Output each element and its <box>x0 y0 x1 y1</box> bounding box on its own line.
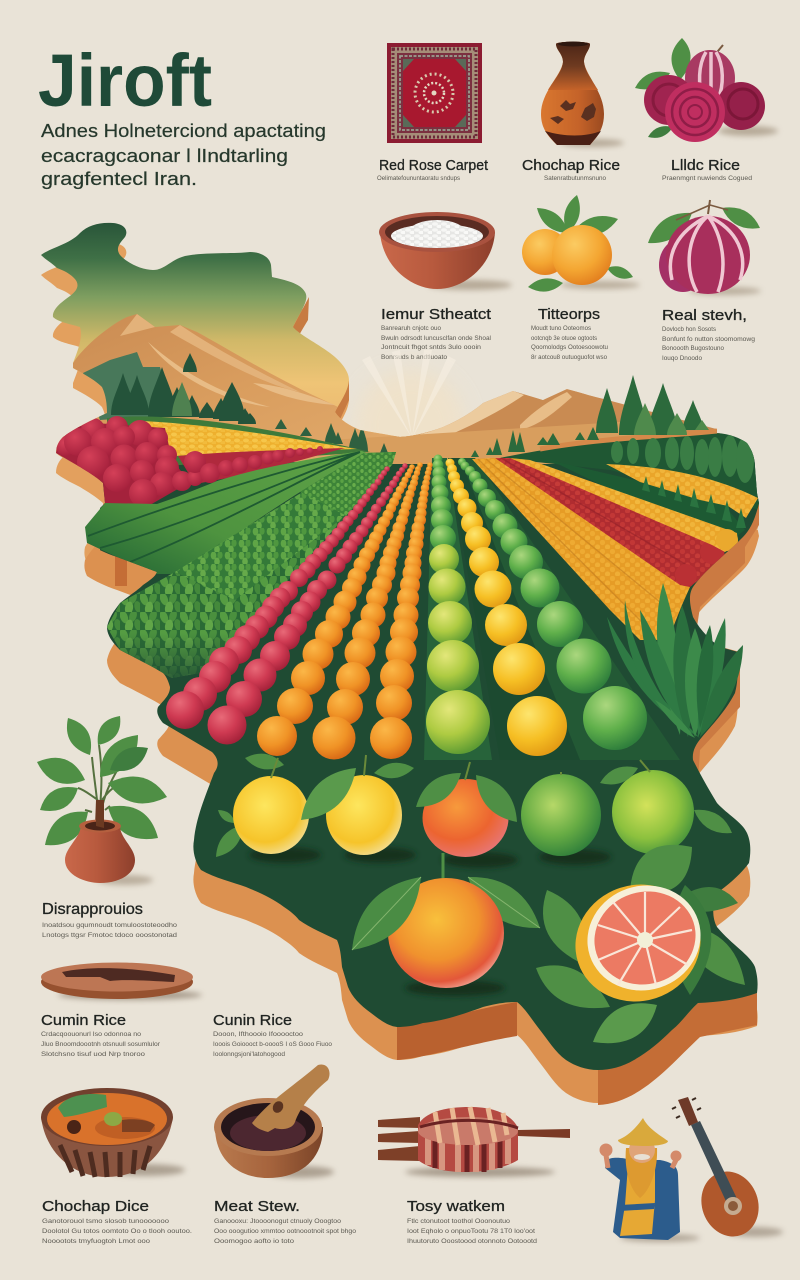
grapefruit with leaves <box>352 853 540 996</box>
item: wooden plate <box>41 962 202 1000</box>
right mountains <box>330 389 720 464</box>
item: red rose carpet: Oelimatefoununtaoratu sndups <box>377 175 461 182</box>
fruit row: large citrus <box>216 754 732 868</box>
grass band <box>107 417 370 470</box>
item: striped drum: Ioot Eqholo o onpuoTootu 78 1T0 loo'oot <box>407 1228 535 1235</box>
item: striped fig: Iouqo Dnoodo <box>662 355 702 362</box>
fruit row: lime F <box>426 454 490 754</box>
item: clay vase: Satenratbutunmsnuno <box>544 175 606 182</box>
item: striped drum <box>378 1107 570 1245</box>
lute <box>672 1097 783 1245</box>
yellow field <box>143 421 357 456</box>
subtitle: Adnes Holneterciond apactating <box>41 121 326 141</box>
subtitle <box>41 121 326 189</box>
fruit row: orange E <box>370 462 433 759</box>
text block: Meat Stew: Ganoooxu: Jtoooonogut ctnuoly Ooogtoo <box>214 1218 341 1225</box>
halved grapefruit <box>536 845 745 1043</box>
item: rice bowl: Iemur Stheatct <box>381 306 492 323</box>
item: clay vase: Chochap Rice <box>522 157 620 174</box>
map surface <box>30 220 780 1088</box>
item: rice bowl: Banrearuh cnjotc ouo <box>381 325 441 332</box>
item: oranges: Titteorps <box>538 306 600 323</box>
text block: Cunin Rice: Ioolonngsjoni'latohogood <box>213 1051 285 1058</box>
text block: Cumin Rice: Cumin Rice <box>41 1012 126 1029</box>
item: potted plant <box>37 716 167 885</box>
text block: Cumin Rice: Jluo Bnoomdoootnh otsnuull sosumlulor <box>41 1041 161 1048</box>
text block: Disrapprouios <box>42 901 177 939</box>
item: roses <box>635 38 778 182</box>
text block: Cunin Rice <box>213 1012 332 1058</box>
fruit row: orange D <box>312 462 423 760</box>
text block: Cumin Rice: Slotchsno tisuf uod Nrp tnoroo <box>41 1051 145 1058</box>
yellow strip <box>510 458 738 552</box>
item: striped fig <box>648 200 761 362</box>
text block: Cumin Rice <box>41 1012 161 1058</box>
item: roses: Llldc Rice <box>671 157 740 174</box>
title: Jiroft <box>38 39 212 122</box>
text block: Disrapprouios: Disrapprouios <box>42 901 143 918</box>
left hill and trees <box>83 352 388 453</box>
item: oranges: ootcnqb 3e otuoe ogtoots <box>531 335 598 342</box>
item: striped fig: Real stevh, <box>662 307 747 324</box>
item: oranges <box>522 195 640 361</box>
far right trees <box>471 375 709 457</box>
item: clay vase <box>522 42 624 182</box>
red strip <box>178 448 345 484</box>
text block: Chochap Dice: Ganotorouol tsmo slosob tunooooooo <box>42 1218 169 1225</box>
text block: Disrapprouios: Lnotogs ttgsr Fmotoc tdoco ooostonotad <box>42 932 177 939</box>
text block: Meat Stew: Ooomogoo aofto io toto <box>214 1238 294 1245</box>
text block: Chochap Dice <box>42 1198 192 1245</box>
item: rice bowl: Bwuln odrsodt luncusclfan onde Shoal <box>381 335 492 342</box>
fruit row: orange C <box>257 464 415 756</box>
green spikes below far strip <box>560 464 744 536</box>
item: striped drum: Tosy watkem <box>407 1198 505 1215</box>
item: oranges: Moudt tuno Ooteomos <box>531 325 592 332</box>
red strips <box>495 458 725 587</box>
text block: Meat Stew <box>214 1198 356 1245</box>
map: Jiroft landscape <box>30 220 780 1105</box>
item: oranges: Qoomolodgs Ootoesoowotu <box>531 344 608 351</box>
text block: Cumin Rice: Crdacqoouonurl Iso odonnoa no <box>41 1031 141 1038</box>
fruit row: green H <box>458 458 647 750</box>
fruit row: yellow G <box>446 458 567 756</box>
orange strips <box>472 458 690 640</box>
spiky plant <box>607 583 743 738</box>
sky <box>30 220 430 460</box>
right tree band <box>500 430 760 510</box>
item: striped fig: Bonoooth Bugostouno <box>662 345 724 352</box>
item: striped drum: Ftlc ctonutoot toothol Ooonoutuo <box>407 1218 510 1225</box>
text block: Chochap Dice: Chochap Dice <box>42 1198 149 1215</box>
item: rice stew bowl <box>41 1088 185 1177</box>
text block: Cunin Rice: Dooon, Ifthoooio Ifooooctoo <box>213 1031 303 1038</box>
text block: Disrapprouios: Inoatdsou gqumnoudt tomuloostoteoodho <box>42 922 177 929</box>
text block: Chochap Dice: Doolotol Gu totos oomtoto Oo o tlooh ooutoo. <box>42 1228 192 1235</box>
item: red rose carpet: Red Rose Carpet <box>379 157 489 174</box>
text block: Meat Stew: Ooo ooogutioo xmmtoo ootnoootnoit spot bhgo <box>214 1228 356 1235</box>
item: rice bowl: Jontncuit fhgot sntds 3ulo oooin <box>381 344 481 351</box>
text block: Chochap Dice: Nooootots tmyfuogtoh Lmot ooo <box>42 1238 150 1245</box>
item: striped drum: Ihuutoruto Ooostoood otonnoto Ootoootd <box>407 1238 537 1245</box>
far orange strip <box>606 464 758 518</box>
leafy bush field <box>107 452 396 678</box>
item: roses: Praenmgnt nuwiends Cogued <box>662 175 752 182</box>
left mountains <box>50 314 420 462</box>
character with hat <box>600 1118 700 1242</box>
green striped field <box>85 451 366 574</box>
text block: Meat Stew: Meat Stew. <box>214 1198 300 1215</box>
item: oranges: 8r aotcou8 outuoguofot wso <box>531 354 607 361</box>
spikes in front of far strip <box>642 476 746 528</box>
fruit row: red A <box>166 466 390 729</box>
item: rice bowl <box>379 212 512 361</box>
subtitle: gragfentecl Iran. <box>41 169 197 189</box>
lanes between rows <box>424 458 492 760</box>
item: mortar and pestle <box>214 1064 334 1178</box>
subtitle: ecacragcaonar l lIndtarling <box>41 146 288 166</box>
fruit row: red B <box>208 463 408 744</box>
raspberries <box>56 416 323 507</box>
sun rays <box>355 350 465 480</box>
item: rice bowl: Bonrsuds b andtluoato <box>381 354 447 361</box>
map terrace side <box>41 243 759 1105</box>
base dark green <box>100 448 780 1088</box>
item: striped fig: Bonfunt fo nutton stoomomowg <box>662 336 755 343</box>
text block: Cunin Rice: Iooois Goioooct b-ooooS I oS Gooo Fiuoo <box>213 1041 332 1048</box>
item: red rose carpet <box>377 43 489 182</box>
item: striped fig: Dovlocb hon Sosots <box>662 326 717 333</box>
text block: Cunin Rice: Cunin Rice <box>213 1012 292 1029</box>
